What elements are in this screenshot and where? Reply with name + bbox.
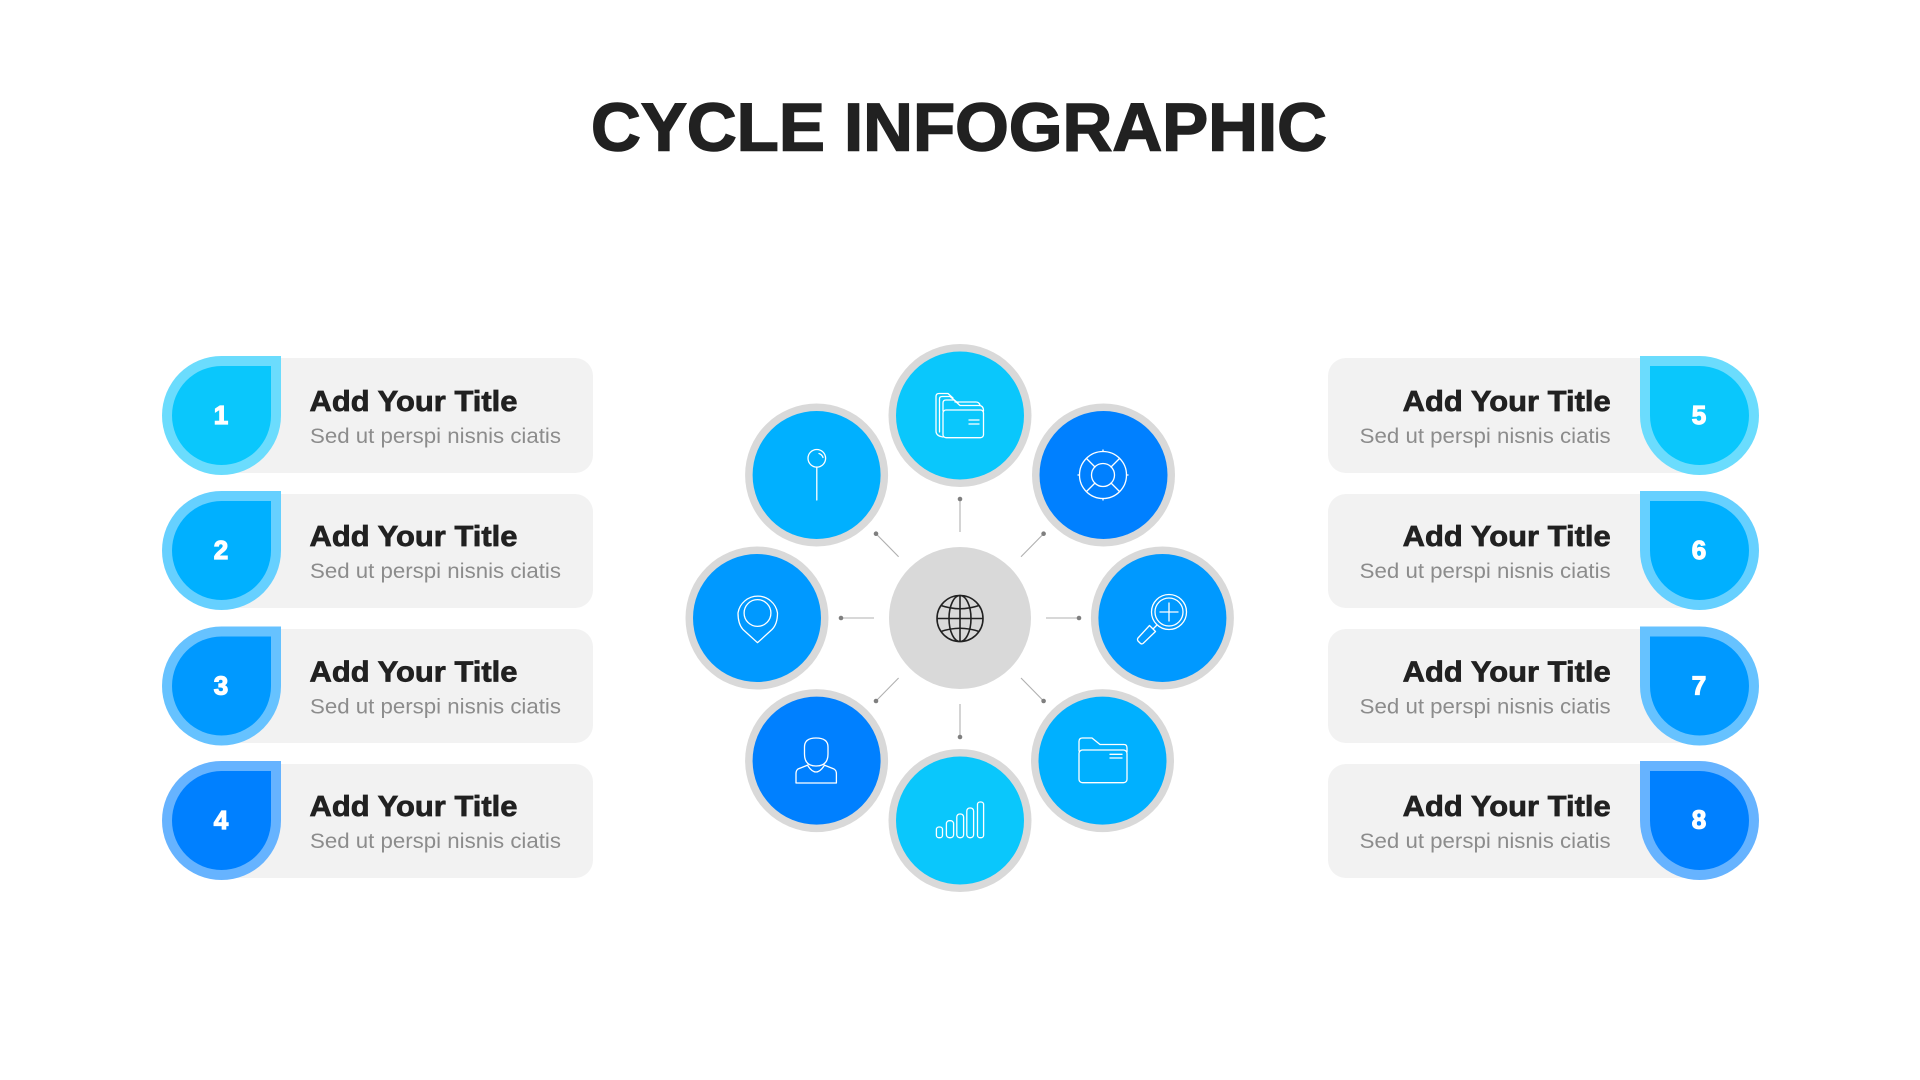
panel: item 2: 2: [214, 535, 228, 565]
title: CYCLE INFOGRAPHIC: [591, 90, 1327, 166]
panel: item 1: Sed ut perspi nisnis ciatis: [310, 425, 561, 448]
panel: item 7: Add Your Title: [1403, 656, 1611, 688]
panel: item 2: Sed ut perspi nisnis ciatis: [310, 560, 561, 583]
panel: item 5: Sed ut perspi nisnis ciatis: [1360, 425, 1611, 448]
panel: item 8: Sed ut perspi nisnis ciatis: [1360, 830, 1611, 853]
panel: item 3: Sed ut perspi nisnis ciatis: [310, 696, 561, 718]
panel: item 8: 8: [1692, 804, 1706, 834]
panel: item 7: Sed ut perspi nisnis ciatis: [1360, 696, 1611, 718]
panel: item 4: [162, 761, 593, 880]
panel: item 4: Add Your Title: [310, 791, 518, 823]
circle: top, stacked folders icon: [888, 344, 1032, 487]
panel: item 3: [162, 626, 593, 746]
panel: item 8: Add Your Title: [1403, 791, 1611, 823]
panel: item 6: [1328, 491, 1759, 610]
circle: upper right, lifebuoy icon: [1032, 404, 1175, 546]
panel: item 5: Add Your Title: [1403, 386, 1611, 418]
center hub with globe icon: [889, 547, 1031, 689]
panel: item 2: Add Your Title: [310, 521, 518, 553]
panel: item 3: 3: [214, 670, 228, 700]
panel: item 1: Add Your Title: [310, 386, 518, 418]
panel: item 1: [162, 356, 593, 475]
circle: lower right, folder icon: [1031, 689, 1174, 832]
panel: item 4: 4: [214, 805, 229, 835]
panel: item 6: Sed ut perspi nisnis ciatis: [1360, 560, 1611, 583]
panel: item 7: 7: [1692, 670, 1706, 700]
circle: right, magnifier icon: [1091, 546, 1234, 690]
panel: item 4: Sed ut perspi nisnis ciatis: [310, 830, 561, 853]
circle: left, location pin icon: [686, 546, 828, 690]
circle: upper left, pushpin icon: [745, 404, 888, 546]
panel: item 1: 1: [214, 400, 228, 430]
connectors between hub and circles: [839, 497, 1081, 739]
circle: bottom, signal bars icon: [888, 749, 1032, 892]
panel: item 7: [1328, 626, 1759, 746]
panel: item 6: Add Your Title: [1403, 521, 1611, 553]
panel: item 5: 5: [1692, 400, 1706, 430]
panel: item 2: [162, 491, 593, 610]
panel: item 6: 6: [1692, 535, 1706, 565]
circle: lower left, person icon: [745, 689, 888, 832]
panel: item 5: [1328, 356, 1759, 475]
panel: item 3: Add Your Title: [310, 656, 518, 688]
panel: item 8: [1328, 761, 1759, 880]
